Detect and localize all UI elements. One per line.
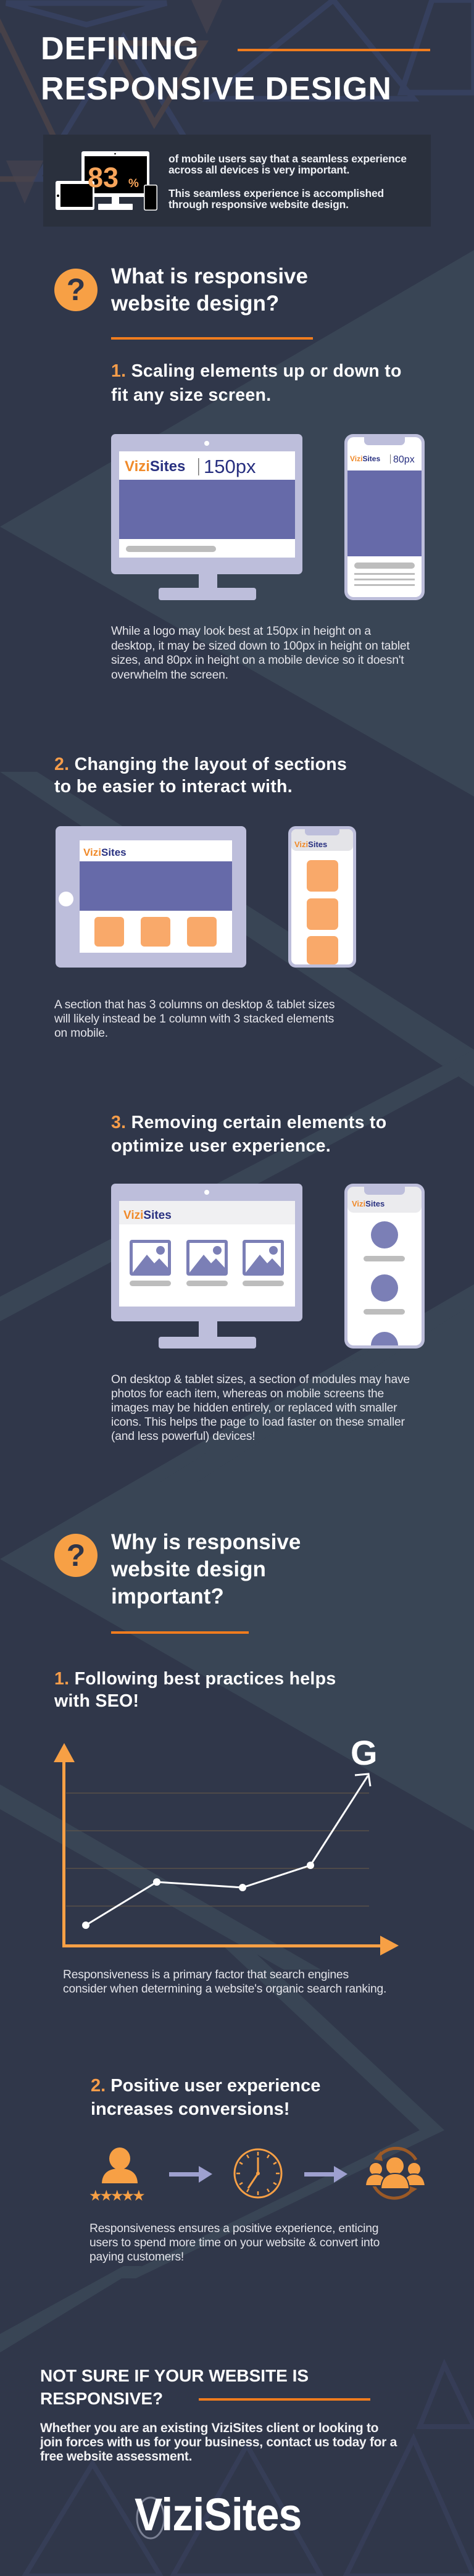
title: RESPONSIVE DESIGN	[41, 71, 392, 107]
CTA heading: RESPONSIVE?	[40, 2389, 163, 2408]
CTA heading: NOT SURE IF YOUR WEBSITE IS	[40, 2366, 309, 2385]
subheading 3	[111, 1113, 386, 1156]
stat text	[168, 153, 407, 211]
subheading: SEO: with SEO!	[54, 1691, 139, 1711]
illustration: phone with icons: ViziSites	[352, 1199, 385, 1208]
paragraph: removing elements: icons. This helps the page to load faster on these smaller	[111, 1416, 405, 1429]
CTA paragraph	[40, 2421, 397, 2464]
subheading 2	[54, 755, 347, 797]
heading: why is responsive	[111, 1530, 301, 1608]
icon: question mark 2: ?	[67, 1538, 85, 1573]
subheading: conversions: increases conversions!	[91, 2099, 289, 2119]
paragraph: removing elements: photos for each item, whereas on mobile screens the	[111, 1387, 384, 1400]
icon: devices with 83%: 83	[88, 162, 118, 193]
icons: user to time to customers: ★★★★★	[89, 2187, 144, 2204]
heading: why is responsive: website design	[111, 1557, 266, 1581]
illustration: scaling desktop: ViziSites	[125, 458, 185, 475]
heading: what is responsive: What is responsive	[111, 264, 308, 288]
illustration: scaling phone: ViziSites	[350, 454, 380, 463]
paragraph: columns: will likely instead be 1 column with 3 stacked elements	[54, 1013, 334, 1026]
illustration: scaling desktop	[111, 434, 302, 600]
illustration: tablet layout: ViziSites	[83, 847, 127, 858]
illustration: scaling phone: 80px	[393, 454, 415, 465]
heading: why is responsive: important?	[111, 1584, 224, 1608]
title	[41, 31, 392, 107]
chart: SEO growth	[54, 1733, 399, 1955]
paragraph: SEO: consider when determining a website's organic search ranking.	[63, 1982, 386, 1996]
title: DEFINING	[41, 31, 199, 67]
illustration: phone stacked: ViziSites	[294, 840, 327, 849]
icon: question mark 1: ?	[67, 272, 85, 307]
illustration: desktop with images	[111, 1184, 302, 1349]
stat text: across all devices is very important. This seamless experience is accomplished	[168, 164, 384, 199]
panel: 83% stat	[43, 135, 431, 227]
subheading 3: 3. Removing certain elements to	[111, 1113, 386, 1132]
paragraph: SEO: Responsiveness is a primary factor that search engines	[63, 1968, 349, 1981]
stat text: of mobile users say that a seamless experience	[168, 153, 407, 165]
paragraph: removing elements	[111, 1373, 410, 1443]
CTA heading	[40, 2366, 309, 2408]
subheading 1: 1. Scaling elements up or down to	[111, 361, 402, 381]
icons: user to time to customers	[89, 2146, 425, 2204]
paragraph: conversions: paying customers!	[89, 2251, 184, 2264]
illustration: tablet layout	[56, 826, 246, 968]
heading: what is responsive: website design?	[111, 291, 279, 316]
stat text: through responsive website design.	[168, 198, 349, 211]
subheading: SEO	[54, 1669, 336, 1711]
paragraph: logo sizes: overwhelm the screen.	[111, 668, 228, 682]
subheading: conversions: 2. Positive user experience	[91, 2076, 320, 2096]
heading: what is responsive	[111, 264, 308, 316]
paragraph: columns	[54, 998, 335, 1040]
paragraph: logo sizes: sizes, and 80px in height on a mobile device so it doesn't	[111, 654, 404, 667]
icon: question mark 2	[54, 1534, 98, 1577]
CTA paragraph: free website assessment.	[40, 2449, 192, 2464]
paragraph: logo sizes: While a logo may look best at 150px in height on a	[111, 625, 371, 638]
heading: why is responsive: Why is responsive	[111, 1530, 301, 1554]
CTA paragraph: Whether you are an existing ViziSites client or looking to	[40, 2421, 378, 2435]
subheading: conversions	[91, 2076, 320, 2119]
paragraph: logo sizes	[111, 625, 410, 682]
subheading 2: to be easier to interact with.	[54, 777, 293, 797]
logo: ViziSites: ViziSites	[135, 2489, 301, 2540]
paragraph: SEO	[63, 1968, 386, 1996]
illustration: phone with icons	[344, 1184, 425, 1349]
subheading 1	[111, 361, 402, 405]
paragraph: removing elements: images may be hidden entirely, or replaced with smaller	[111, 1402, 397, 1415]
paragraph: columns: on mobile.	[54, 1027, 108, 1040]
illustration: phone stacked	[288, 826, 356, 968]
paragraph: conversions: users to spend more time on your website & convert into	[89, 2236, 380, 2249]
icon: devices with 83%: %	[128, 177, 139, 190]
paragraph: conversions	[89, 2222, 380, 2264]
paragraph: conversions: Responsiveness ensures a positive experience, enticing	[89, 2222, 378, 2235]
illustration: scaling phone	[344, 434, 425, 600]
paragraph: columns: A section that has 3 columns on desktop & tablet sizes	[54, 998, 335, 1011]
subheading 3: optimize user experience.	[111, 1136, 331, 1156]
subheading 1: fit any size screen.	[111, 385, 271, 405]
CTA paragraph: join forces with us for your business, contact us today for a	[40, 2435, 397, 2449]
paragraph: removing elements: On desktop & tablet sizes, a section of modules may have	[111, 1373, 410, 1386]
paragraph: logo sizes: desktop, it may be sized down to 100px in height on tablet	[111, 640, 410, 652]
icon: devices with 83%	[56, 151, 157, 211]
title accent line	[238, 49, 430, 51]
illustration: desktop with images: ViziSites	[123, 1209, 172, 1222]
chart: SEO growth: G	[351, 1733, 378, 1772]
heading underline	[111, 337, 313, 340]
illustration: scaling desktop: 150px	[204, 456, 256, 477]
CTA accent line	[199, 2398, 370, 2401]
icon: question mark 1	[54, 269, 98, 311]
paragraph: removing elements: (and less powerful) devices!	[111, 1430, 255, 1443]
subheading: SEO: 1. Following best practices helps	[54, 1669, 336, 1689]
heading underline 2	[111, 1631, 249, 1634]
subheading 2: 2. Changing the layout of sections	[54, 755, 347, 774]
